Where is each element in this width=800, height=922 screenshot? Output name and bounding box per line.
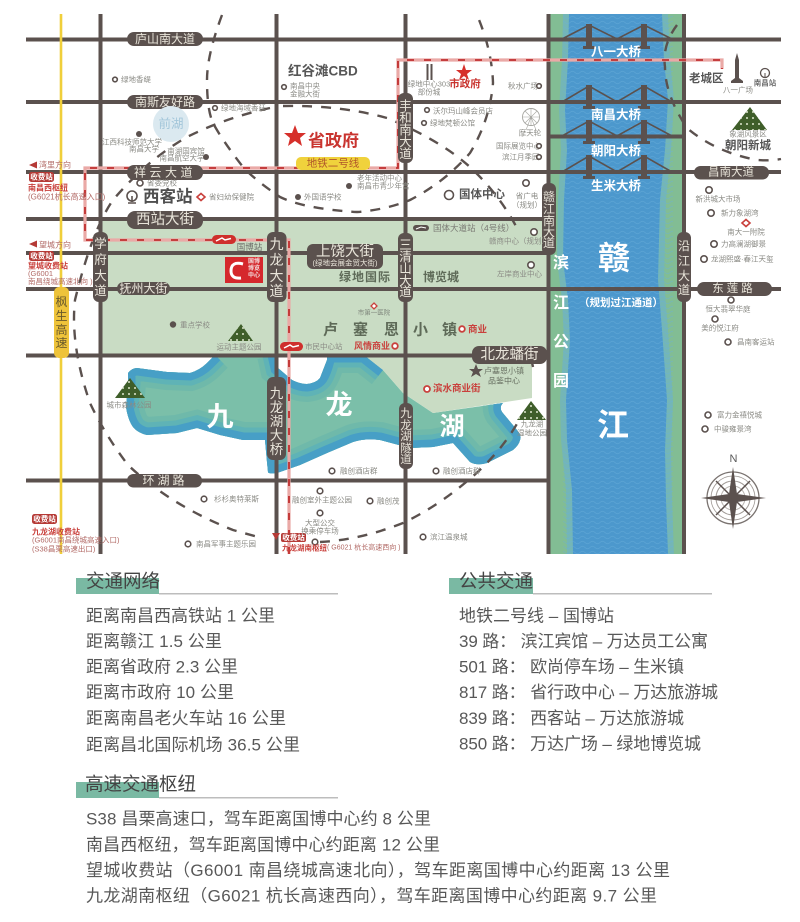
- pois: west and central: 省妇幼保健院: [209, 192, 254, 202]
- expressway label: 枫生高速: 枫: [55, 294, 68, 309]
- panel: jiulong lake: [126, 358, 521, 474]
- toll: 望城收费站: [28, 240, 93, 286]
- icon: 八一广场 tower: 八一广场: [723, 84, 753, 94]
- road label: 昌南大道: [694, 164, 769, 180]
- road label: 东莲路: 东莲路: [712, 281, 756, 295]
- road label: 沿江大道: 江: [678, 254, 690, 268]
- toll: 九龙湖南枢纽: ( G6021 杭长高速西向 ): [327, 542, 401, 552]
- river labels: bridges: 八一大桥: [591, 44, 641, 59]
- district: 朝阳新城: 朝阳新城: [725, 138, 771, 152]
- landmark: 市政府: [449, 64, 481, 90]
- list: 交通网络 items: 距离南昌西高铁站 1 公里: [86, 606, 275, 626]
- district: 老城区: 老城区: [689, 71, 724, 85]
- pois: west and central: 南昌市青少年宫: [357, 180, 410, 190]
- metro label: 地铁二号线: 地铁二号线: [307, 156, 360, 170]
- pois: river west bank: 滨江月季园: [502, 152, 540, 162]
- pois: west and central: 南昌军事主题乐园: [196, 538, 256, 548]
- road label: 九龙湖大桥: 九: [270, 386, 284, 400]
- expressway: fengsheng: [60, 14, 62, 554]
- pois: river west bank: 秋水广场: [508, 80, 538, 90]
- road label: 东莲路: [697, 281, 772, 296]
- road label: 丰和南大道: 道: [399, 147, 412, 161]
- road label: 丰和南大道: 南: [399, 122, 412, 137]
- metro station: 国博站: 国博站: [237, 242, 263, 252]
- toll: 九龙湖收费站: (S38昌栗高速出口): [32, 544, 96, 554]
- road label: 抚州大街: 抚州大街: [119, 282, 168, 296]
- icon: 摩天轮: 摩天轮: [519, 128, 542, 138]
- list: 公共交通 items: 850 路： 万达广场 – 绿地博览城: [459, 734, 701, 754]
- pois: south: 融创茂: [377, 496, 400, 506]
- pois: west and central: 杉杉奥特莱斯: [214, 494, 259, 504]
- pois: river west bank: 绿地梵顿公馆: [430, 118, 475, 128]
- commercial labels: 恩: [384, 322, 399, 338]
- landmark: 前湖: [153, 106, 189, 142]
- landmark: 前湖: 前湖: [158, 116, 184, 131]
- list: 高速交通枢纽 items: 南昌西枢纽，驾车距离国博中心约距离 12 公里: [86, 836, 440, 854]
- icon: compass: N: [730, 453, 738, 465]
- toll: 望城收费站: (G6001: [28, 269, 53, 278]
- pois: east side: 新力象湖湾: [721, 208, 759, 218]
- landmark: 省政府: 省政府: [308, 130, 359, 150]
- commercial labels: 卢: [323, 322, 338, 338]
- toll: 九龙湖收费站: [32, 514, 120, 554]
- commercial labels: 博览城: [423, 269, 459, 284]
- road label: 赣江南大道: 大: [543, 225, 555, 239]
- pois: south: 大型公交: [305, 518, 335, 528]
- list: 高速交通枢纽 items: 九龙湖南枢纽（G6021 杭长高速西向），驾车距离国博中心约距离 9.7 公里: [86, 886, 657, 906]
- road label: 学府大道: 道: [94, 284, 107, 298]
- icon: 八一广场 tower: [723, 53, 753, 94]
- logo: 国博会展中心: 国博: [248, 257, 260, 265]
- heading: 高速交通枢纽: 高速交通枢纽: [85, 774, 196, 794]
- pois: river west bank: 沃尔玛山峰会员店: [433, 106, 493, 116]
- road grid: [26, 14, 781, 554]
- landmark: 国体中心: [444, 187, 505, 201]
- park name: 滨江公园: 公: [553, 334, 569, 350]
- road label: 九龙湖隧道: 隧: [400, 441, 412, 455]
- road label: 九龙湖大桥: 大: [270, 428, 283, 442]
- tree icon: 九龙湖湿地公园: [517, 401, 547, 438]
- landmark: 西客站: [127, 186, 192, 206]
- expressway label: 枫生高速: 高: [55, 322, 68, 337]
- toll: 望城收费站: 望城收费站: [28, 260, 68, 270]
- river name: 赣江: 赣: [598, 240, 630, 276]
- logo: 国博会展中心: 博览: [248, 264, 260, 272]
- road label: 上饶大街: 上饶大街: [316, 243, 374, 260]
- pois: river west bank: 省广电: [516, 190, 539, 200]
- pois: east side: 富力金禧悦城: [717, 410, 762, 420]
- toll: 望城收费站: 收费站: [30, 250, 53, 260]
- panel: 交通网络: [76, 570, 338, 754]
- poi: 绿地中心303: 部份城: [418, 86, 441, 96]
- river name: 赣江: 江: [597, 407, 629, 443]
- road label: 西站大街: 西站大街: [136, 211, 194, 228]
- lake name: 九龙湖: [206, 390, 465, 441]
- park name: 滨江公园: 江: [553, 294, 569, 312]
- pois: river west bank: （规划）: [512, 200, 542, 210]
- pois: east side: 昌南客运站: [737, 336, 775, 346]
- pois: west and central: 南昌大学: [129, 144, 159, 154]
- heading: 公共交通: 公共交通: [459, 570, 533, 592]
- pois: east side: [696, 187, 775, 434]
- park name: 滨江公园: 园: [553, 372, 569, 390]
- list: 交通网络 items: 距离昌北国际机场 36.5 公里: [86, 736, 300, 754]
- road label: 祥云大道: 祥云大道: [134, 166, 196, 180]
- tree icon: 运动主题公园: 运动主题公园: [216, 342, 262, 352]
- logo: 国博会展中心: 中心: [248, 271, 260, 279]
- list: 公共交通 items: 39 路： 滨江宾馆 – 万达员工公寓: [459, 632, 708, 651]
- road label: 九龙湖大桥: [267, 377, 286, 460]
- toll: 九龙湖收费站: (G6001南昌绕城高速入口): [32, 534, 120, 544]
- road label: 九龙大道: 九: [270, 236, 284, 252]
- toll: 南昌西枢纽: [28, 160, 106, 202]
- road label: 九龙湖隧道: [399, 403, 413, 469]
- toll: 九龙湖南枢纽: 收费站: [282, 532, 305, 542]
- icon: 南昌站: [754, 68, 777, 88]
- metro station: 市民中心站: 市民中心站: [305, 341, 343, 351]
- expressway label: 枫生高速: 生: [55, 309, 68, 323]
- list: 高速交通枢纽 items: S38 昌栗高速口，驾车距离国博中心约 8 公里: [86, 810, 431, 828]
- road label: 九龙湖隧道: 龙: [400, 419, 412, 432]
- expressway label: 枫生高速: 速: [55, 336, 68, 350]
- metro line 2: [85, 60, 722, 554]
- pois: south: 换乘停车场: [301, 526, 339, 536]
- poi: 绿地中心303: [408, 64, 450, 96]
- road label: 九龙大道: 道: [270, 283, 284, 299]
- pois: west and central: 绿地海域香廷: [221, 102, 266, 112]
- road label: 丰和南大道: 丰: [399, 99, 412, 113]
- pois: south: 融创室外主题公园: [292, 494, 352, 504]
- road label: 九龙湖大桥: 龙: [270, 400, 283, 414]
- metro station: 国体大道站: 国体大道站（4号线）: [433, 223, 514, 233]
- list: 公共交通 items: 地铁二号线 – 国博站: [459, 606, 614, 626]
- river name: 赣江: [597, 240, 630, 443]
- pois: west and central: 南湖国宾馆: [167, 146, 205, 156]
- toll: 望城收费站: 望城方向: [39, 240, 71, 250]
- tree icon: 城市森林公园: [106, 378, 152, 410]
- poi: 绿地中心303: 绿地中心303: [408, 78, 450, 88]
- road label: 九龙湖大桥: 湖: [270, 414, 283, 428]
- district: 朝阳新城: [725, 107, 771, 152]
- pois: east side: 南大一附院: [727, 226, 765, 236]
- list: 高速交通枢纽 items: 望城收费站（G6001 南昌绕城高速北向），驾车距离国博中心约距离 13 公里: [86, 861, 670, 880]
- icon: 南昌站: 南昌站: [754, 78, 777, 88]
- bridges: [562, 24, 672, 179]
- logo: 国博会展中心: [225, 257, 263, 283]
- pois: south: 滨江温泉城: [430, 532, 468, 542]
- road label: 沿江大道: 大: [678, 269, 690, 283]
- toll: 南昌西枢纽: 南昌西枢纽: [28, 182, 68, 192]
- district: 朝阳新城: 象湖风景区: [729, 128, 767, 138]
- pois: west and central: [102, 74, 410, 548]
- landmark: 市政府: 市政府: [449, 77, 481, 90]
- road label: 沿江大道: 沿: [678, 239, 690, 253]
- pois: south: 融创酒店群: [443, 466, 481, 476]
- pois: river west bank: 左岸商业中心: [497, 268, 542, 278]
- toll: 九龙湖南枢纽: [272, 532, 401, 552]
- commercial labels: 风情商业: [354, 340, 390, 351]
- list: 交通网络 items: 距离赣江 1.5 公里: [86, 632, 222, 651]
- pois: west and central: 省委党校: [147, 178, 177, 188]
- road label: 丰和南大道: 大: [399, 135, 412, 149]
- road label: 北龙蟠街: 北龙蟠街: [480, 346, 538, 363]
- list: 交通网络 items: [86, 606, 300, 754]
- pois: east side: 力高澜湖御景: [721, 238, 766, 248]
- landmark: 国体中心: 国体中心: [459, 187, 505, 201]
- tree icon: 九龙湖湿地公园: 湿地公园: [517, 428, 547, 438]
- road label: 九龙湖隧道: 道: [400, 452, 412, 466]
- road label: 九龙湖隧道: 九: [400, 407, 412, 420]
- lake name: 九龙湖: 九: [206, 402, 234, 432]
- list: 公共交通 items: 839 路： 西客站 – 万达旅游城: [459, 709, 684, 728]
- tree icon: 运动主题公园: [216, 324, 262, 352]
- pois: west and central: 江西科技师范大学: [102, 136, 162, 146]
- road label: 赣江南大道: 南: [543, 213, 555, 228]
- road label: 环湖路: 环湖路: [142, 472, 188, 488]
- road label: 学府大道: [93, 232, 108, 302]
- road label: 赣江南大道: [542, 183, 556, 255]
- toll: 南昌西枢纽: 湾里方向: [39, 160, 71, 170]
- pois: west and central: 金融大街: [290, 88, 320, 98]
- list: 交通网络 items: 距离南昌老火车站 16 公里: [86, 709, 286, 728]
- tree icon: 九龙湖湿地公园: 九龙湖: [521, 418, 543, 428]
- list: 公共交通 items: 501 路： 欧尚停车场 – 生米镇: [459, 658, 684, 676]
- river labels: bridges: [591, 44, 641, 193]
- lake name: 九龙湖: 龙: [326, 390, 352, 420]
- icon: compass: [701, 453, 766, 529]
- pois: east side: 恒大翡翠华庭: [706, 304, 751, 314]
- park name: 滨江公园: 滨: [553, 252, 569, 272]
- commercial labels: 滨水商业街: [433, 382, 481, 394]
- road label: 赣江南大道: 赣: [543, 190, 555, 204]
- pois: west and central: 南昌航空大学: [160, 152, 205, 162]
- landmark: 西客站: 西客站: [143, 186, 192, 206]
- expressway label: 枫生高速: [54, 287, 69, 358]
- metro station: 国博站: [212, 235, 263, 252]
- river note: （规划过江通道）: [579, 296, 663, 309]
- list: 公共交通 items: 817 路： 省行政中心 – 万达旅游城: [459, 683, 718, 702]
- commercial labels: [323, 269, 488, 394]
- road label: 上饶大街: [307, 243, 383, 269]
- marker: 卢塞恩小镇品鉴中心: 品鉴中心: [488, 376, 520, 386]
- marker: 卢塞恩小镇品鉴中心: 卢塞恩小镇: [484, 366, 524, 376]
- road label: 三清山大道: 三: [399, 238, 412, 252]
- pois: west and central: 外国语学校: [304, 192, 342, 202]
- road label: 北龙蟠街: [472, 346, 547, 364]
- panel: 高速交通枢纽: [76, 774, 670, 906]
- tree icon: 城市森林公园: 城市森林公园: [106, 400, 152, 410]
- road label: 学府大道: 府: [94, 252, 107, 267]
- river labels: bridges: 南昌大桥: [591, 107, 641, 122]
- toll: 南昌西枢纽: (G6021杭长高速入口): [28, 192, 106, 202]
- toll: 九龙湖收费站: 九龙湖收费站: [32, 526, 80, 536]
- road label: 九龙大道: [267, 232, 286, 302]
- list: 交通网络 items: 距离市政府 10 公里: [86, 683, 234, 702]
- panel: ganjiang river: [550, 14, 683, 554]
- pois: west and central: 重点学校: [180, 320, 210, 330]
- ring road dashes: [74, 15, 781, 542]
- pois: west and central: 绿地香缇: [121, 74, 151, 84]
- pois: east side: 中骏雍景湾: [714, 424, 752, 434]
- pois: east side: 新洪城大市场: [696, 194, 741, 204]
- lake name: 九龙湖: 湖: [439, 413, 465, 441]
- list: 高速交通枢纽 items: [86, 810, 670, 906]
- river labels: bridges: 生米大桥: [591, 178, 641, 193]
- river labels: bridges: 朝阳大桥: [591, 143, 641, 158]
- commercial labels: 商业: [468, 324, 488, 336]
- road label: 沿江大道: 道: [678, 283, 690, 297]
- toll: 九龙湖收费站: 收费站: [33, 514, 56, 524]
- road label: 南斯友好路: 南斯友好路: [135, 94, 195, 109]
- panel: 公共交通: [449, 570, 718, 754]
- list: 公共交通 items: [459, 606, 718, 754]
- pois: river west bank: 国际展览中心: [496, 140, 541, 150]
- toll: 南昌西枢纽: 收费站: [30, 172, 53, 182]
- metro station: 市民中心站: [280, 341, 343, 351]
- road label: 赣江南大道: 江: [543, 202, 555, 216]
- icon: 摩天轮: [519, 108, 542, 138]
- road label: 学府大道: 大: [94, 269, 107, 283]
- road label: 丰和南大道: 和: [399, 111, 412, 125]
- road label: 三清山大道: 道: [399, 285, 412, 299]
- road label: 昌南大道: 昌南大道: [708, 164, 754, 178]
- road label: 九龙湖隧道: 湖: [400, 429, 412, 443]
- map background: [26, 14, 781, 554]
- commercial labels: 小: [413, 322, 428, 338]
- pois: east side: 龙湖熙盛·春江天玺: [711, 254, 774, 264]
- pois: west and central: 老年活动中心: [357, 172, 402, 182]
- toll: 九龙湖南枢纽: 九龙湖南枢纽: [282, 542, 327, 552]
- panel: green district: [102, 221, 548, 413]
- road label: 丰和南大道: [398, 93, 413, 163]
- pois: river west bank: 赣商中心（规划）: [489, 236, 549, 246]
- road label: 环湖路: [127, 472, 202, 488]
- landmark: 省政府: [284, 125, 359, 150]
- pois: west and central: 市第一医院: [358, 308, 391, 316]
- road label: 九龙大道: 龙: [270, 252, 284, 268]
- road label: 三清山大道: 清: [399, 250, 412, 264]
- road label: 上饶大街: (绿地会展金贸大街): [312, 258, 378, 268]
- metro label: 地铁二号线: [296, 156, 370, 170]
- road label: 九龙湖大桥: 桥: [270, 442, 284, 456]
- commercial labels: 塞: [353, 320, 368, 338]
- list: 交通网络 items: 距离省政府 2.3 公里: [86, 658, 238, 676]
- pois: east side: 美的悦江府: [701, 322, 739, 332]
- road label: 庐山南大道: 庐山南大道: [135, 31, 195, 46]
- road label: 三清山大道: [398, 233, 413, 302]
- commercial labels: 镇: [442, 320, 457, 338]
- road label: 西站大街: [127, 211, 203, 229]
- pois: river west bank: [422, 80, 549, 278]
- road label: 三清山大道: 山: [399, 262, 412, 276]
- road label: 学府大道: 学: [94, 236, 107, 251]
- landmark: 红谷滩CBD: 红谷滩CBD: [288, 62, 358, 78]
- toll: 望城收费站: 南昌绕城高速北向 ): [28, 276, 93, 286]
- pois: west and central: 南昌中央: [290, 80, 320, 90]
- road label: 三清山大道: 大: [399, 274, 412, 288]
- heading: 交通网络: 交通网络: [86, 570, 160, 592]
- road label: 沿江大道: [677, 232, 691, 302]
- road label: 九龙大道: 大: [270, 268, 284, 284]
- road label: 赣江南大道: 道: [543, 236, 555, 250]
- commercial labels: 绿地国际: [339, 269, 391, 284]
- pois: south: [292, 466, 481, 542]
- marker: 卢塞恩小镇品鉴中心: [469, 364, 524, 386]
- pois: south: 融创酒店群: [340, 466, 378, 476]
